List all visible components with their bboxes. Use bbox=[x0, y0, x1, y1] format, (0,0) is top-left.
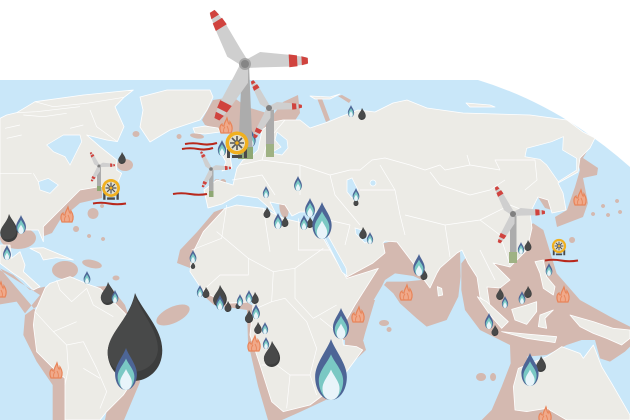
icon: oil drop Gulf bbox=[359, 227, 367, 239]
turbine: Atlantic Canada small bbox=[88, 152, 115, 191]
icon: fire US east bbox=[61, 207, 73, 222]
icon: gas flame Ukraine bbox=[294, 176, 302, 191]
icon: gas flame Guyana bbox=[112, 290, 118, 303]
water: Aral Sea bbox=[370, 180, 376, 186]
icon: fire Angola bbox=[248, 336, 260, 351]
land: Africa bbox=[190, 205, 378, 412]
basin: Kara strip bbox=[338, 95, 351, 103]
land masses bbox=[0, 90, 630, 420]
yellow turbine badges bbox=[102, 132, 566, 255]
icon: gas flame Levant bbox=[305, 198, 315, 217]
icon: gas flame Libya bbox=[274, 213, 282, 229]
land: Cuba bbox=[30, 248, 73, 260]
icon: oil drop Equatorial Guinea bbox=[245, 310, 253, 323]
lakes: Great Lakes bbox=[38, 178, 58, 193]
land: Eurasia bbox=[204, 100, 595, 307]
icon: fire Japan bbox=[574, 190, 586, 205]
basin: Caribbean bbox=[52, 261, 78, 279]
land: New Guinea bbox=[570, 315, 630, 345]
icon: oil drop large Brazil bbox=[108, 293, 162, 381]
icon: gas flame Ghana bbox=[216, 295, 224, 310]
icon: gas flame Mexico bbox=[3, 245, 11, 260]
oil drops bbox=[0, 108, 546, 381]
gas flames bbox=[3, 105, 552, 400]
land: mainland Canada and US bbox=[0, 90, 133, 242]
icon: oil drop Benin bbox=[236, 301, 240, 309]
basin: Black Sea bbox=[302, 182, 333, 195]
basin: Greenland west bbox=[132, 131, 140, 137]
land: Java bbox=[502, 332, 557, 343]
borders: Eurasia bbox=[232, 120, 537, 280]
land: Arctic Novaya bbox=[310, 94, 340, 99]
wave: US offshore bbox=[93, 203, 126, 204]
borders: arctic channels bbox=[0, 97, 124, 182]
icon: gas flame Tanzania bbox=[333, 308, 349, 339]
basin: Africa coast bbox=[177, 208, 375, 420]
land: Sumatra bbox=[477, 297, 508, 328]
icon: gas flame Caspian bbox=[353, 188, 359, 201]
icon: gas flame Egypt large bbox=[312, 202, 332, 239]
basin: US east coast bbox=[43, 186, 102, 236]
basin: Americas Pacific coast bbox=[0, 268, 68, 420]
icon: gas flame Trinidad bbox=[84, 271, 90, 284]
land: Arctic Siberia islands bbox=[466, 103, 495, 107]
icon: oil drop Sumatra bbox=[492, 325, 498, 336]
icon: gas flame Mozambique bbox=[315, 339, 347, 400]
icon: tidal turbine US bbox=[102, 179, 120, 200]
icon: gas flame Italy bbox=[263, 186, 269, 198]
water: Persian Gulf bbox=[355, 228, 370, 243]
land: Borneo bbox=[512, 302, 537, 324]
icon: gas flame UK bbox=[218, 140, 226, 156]
icon: gas flame Cameroon bbox=[252, 304, 260, 319]
icon: fire Arabian Sea bbox=[400, 285, 412, 300]
icon: oil drop Gabon bbox=[254, 322, 262, 334]
icon: fire Norway bbox=[220, 118, 232, 133]
wave: Asia offshore bbox=[545, 260, 578, 261]
icon: gas flame Russia bbox=[348, 105, 354, 117]
icon: oil drop Vietnam bbox=[496, 288, 504, 300]
basin: Atlantic Canada bbox=[117, 159, 133, 171]
basin: Gulf of Mexico bbox=[0, 227, 36, 249]
basin: Japan bbox=[555, 138, 598, 227]
wave: North Sea lower bbox=[182, 148, 213, 150]
icon: oil drop Egypt west bbox=[282, 216, 288, 227]
icon: fire Peru bbox=[50, 363, 62, 378]
offshore basins bbox=[0, 95, 630, 420]
basin: Brazil southeast bbox=[105, 345, 140, 420]
icon: gas flame India bbox=[413, 254, 425, 276]
icon: gas flame Gabon bbox=[262, 322, 268, 334]
basin: Brazil offshore bbox=[153, 300, 193, 330]
borders: Africa bbox=[192, 205, 343, 408]
wave: Iberia offshore bbox=[173, 193, 207, 195]
icon: fire Tanzania bbox=[352, 307, 364, 322]
borders: South America bbox=[35, 280, 113, 408]
icon: oil drop Senegal bbox=[191, 262, 195, 269]
icon: oil drop Nigeria bbox=[251, 292, 259, 304]
basin: eastern Mediterranean bbox=[278, 197, 290, 219]
fire icons bbox=[0, 118, 586, 420]
icon: gas flame Persian Gulf bbox=[367, 232, 373, 244]
icon: tidal turbine Asia bbox=[552, 239, 566, 255]
icon: oil drop Egypt bbox=[307, 217, 313, 228]
land: Sri Lanka bbox=[437, 287, 443, 296]
icon: gas flame Nigeria bbox=[246, 290, 252, 303]
icon: gas flame Philippines bbox=[546, 263, 552, 276]
land: Great Britain bbox=[221, 150, 232, 171]
turbine: Baltic medium bbox=[247, 79, 302, 157]
land: Greenland bbox=[140, 90, 213, 142]
basin: Pacific and Atlantic dots bbox=[73, 134, 622, 381]
icon: oil drop Caspian bbox=[354, 198, 358, 206]
lake: Hudson Bay bbox=[47, 135, 82, 165]
icon: oil drop China bbox=[525, 240, 531, 251]
icon: gas flame Egypt west bbox=[300, 215, 308, 230]
icon: gas flame Norway bbox=[246, 129, 256, 147]
basin: North Sea small bbox=[190, 133, 204, 139]
basin: Caribbean dot bbox=[112, 276, 120, 280]
land: Central and South America bbox=[0, 245, 137, 420]
icon: oil drop Togo bbox=[225, 301, 231, 312]
icon: gas flame Congo bbox=[263, 337, 269, 349]
water: Okhotsk Sea bbox=[525, 137, 577, 182]
icon: oil drop Angola bbox=[264, 341, 280, 367]
water: Red Sea bbox=[322, 232, 347, 276]
icon: oil drop Sierra Leone bbox=[203, 287, 209, 298]
basin: Guyana coast bbox=[88, 286, 128, 314]
water: Caspian Sea bbox=[347, 178, 358, 198]
icon: gas flame Sumatra bbox=[485, 313, 493, 329]
land: North America bbox=[0, 90, 133, 242]
water: Baltic Sea bbox=[271, 132, 288, 155]
icon: gas flame Sierra Leone bbox=[197, 285, 203, 297]
icon: oil drop Libya bbox=[264, 207, 270, 218]
icon: oil drop Gulf of Mexico bbox=[0, 214, 18, 242]
icon: gas flame Senegal bbox=[190, 250, 196, 263]
basin: Arabian Sea and India lobe bbox=[340, 240, 461, 340]
basin: Southeast Asia and Australia bbox=[461, 223, 630, 420]
icon: oil drop Australia bbox=[536, 356, 546, 372]
icon: gas flame Brazil bbox=[115, 348, 137, 390]
basin: Barents strip bbox=[317, 96, 330, 122]
icon: oil drop Russia bbox=[358, 108, 366, 120]
land: Australia bbox=[513, 345, 630, 420]
icon: gas flame Togo bbox=[237, 294, 243, 306]
icon: oil drop Canada bbox=[118, 152, 126, 164]
icon: gas flame China bbox=[518, 242, 524, 254]
land: Mexico and Central America bbox=[0, 245, 40, 290]
wind turbines bbox=[88, 8, 545, 263]
turbine: East Asia medium bbox=[491, 185, 545, 263]
icon: oil drop Ghana bbox=[213, 285, 227, 307]
icon: gas flame Gulf of Mexico bbox=[16, 215, 26, 234]
red offshore waves bbox=[93, 143, 578, 261]
wave: North Sea upper bbox=[185, 143, 217, 145]
icon: gas flame Australia bbox=[521, 353, 539, 386]
icon: oil drop Guyana bbox=[101, 282, 115, 305]
icon: tidal turbine North Sea bbox=[226, 132, 248, 158]
icon: oil drop Borneo bbox=[524, 286, 532, 298]
turbine: Iberia small bbox=[198, 151, 231, 197]
icon: oil drop India bbox=[421, 269, 427, 280]
icon: gas flame Borneo bbox=[519, 291, 525, 304]
land: Southeast Asia islands bbox=[437, 260, 630, 420]
turbine: North Sea large bbox=[203, 8, 308, 159]
basin: Yellow Sea bbox=[538, 185, 563, 212]
icon: fire Indonesia bbox=[557, 287, 569, 302]
icon: fire Pacific Mexico bbox=[0, 282, 6, 297]
icon: gas flame Malaysia bbox=[502, 296, 508, 308]
basin: Norwegian Sea bbox=[202, 95, 300, 135]
basin: Caribbean east bbox=[81, 258, 103, 270]
land: Sulawesi bbox=[538, 310, 553, 328]
land: Iceland bbox=[193, 126, 220, 134]
land: Philippines bbox=[535, 260, 555, 295]
land: South America bbox=[33, 277, 137, 420]
icon: fire Australia bbox=[539, 407, 551, 420]
